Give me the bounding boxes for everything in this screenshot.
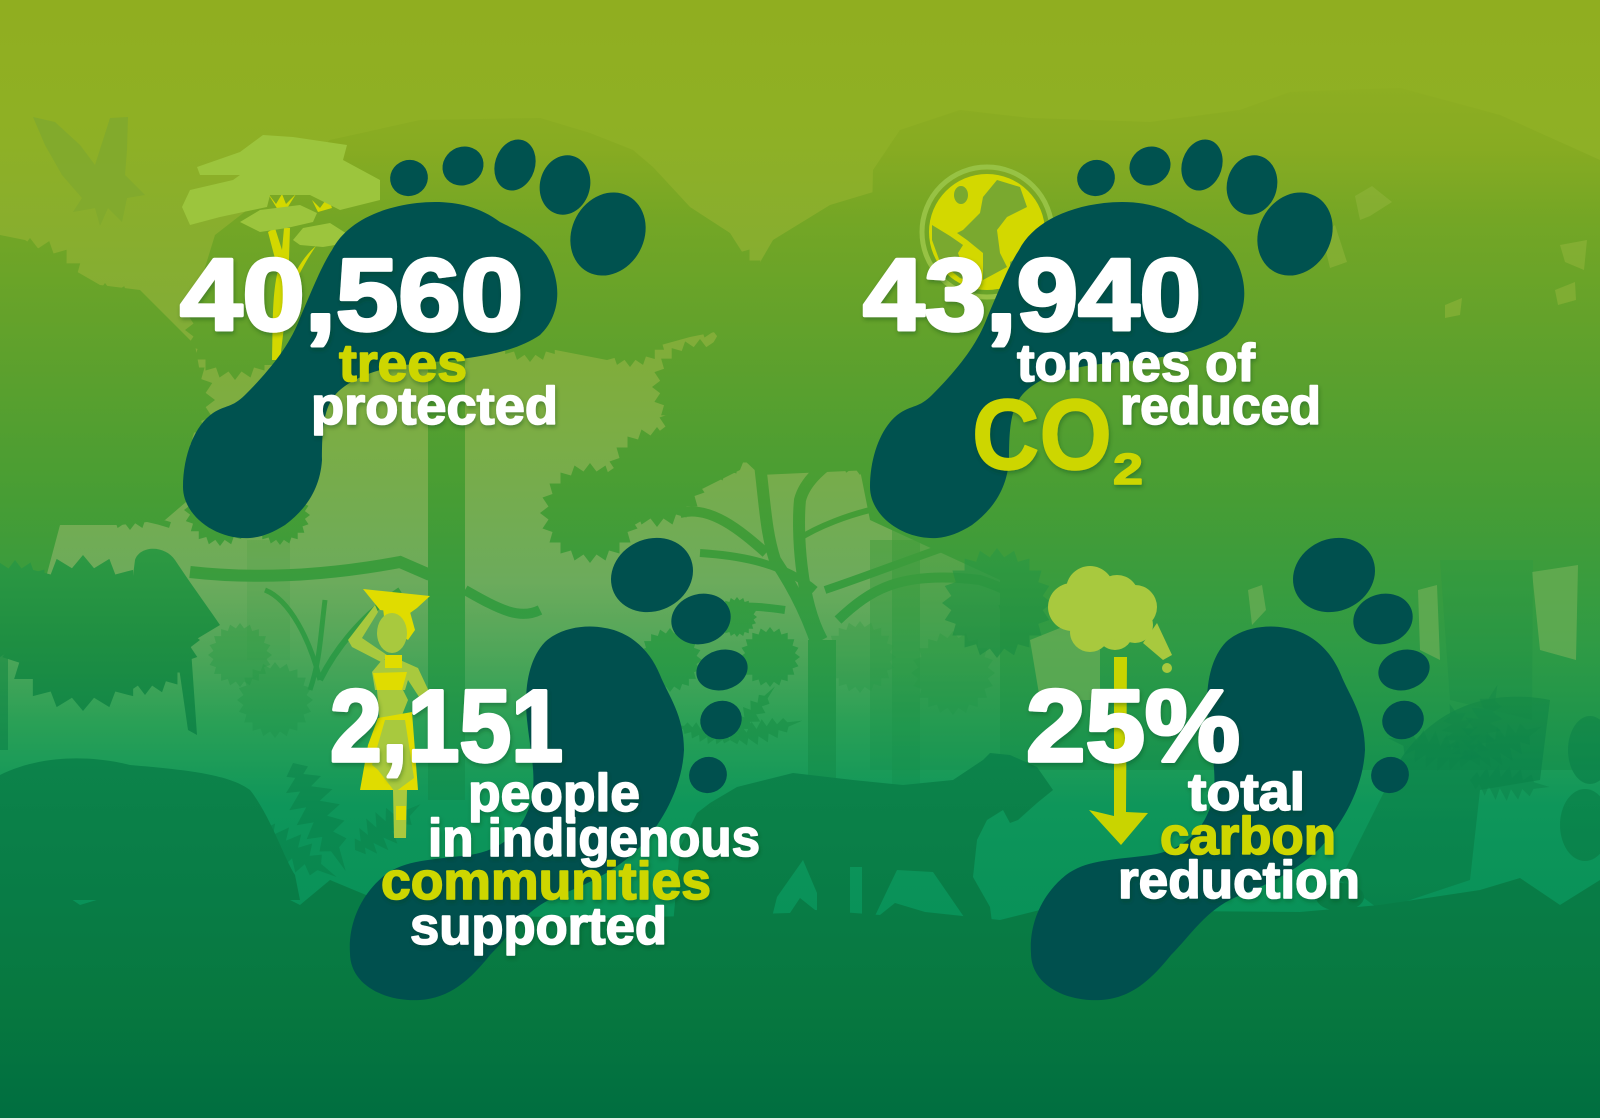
footprint <box>870 134 1347 538</box>
panel: total carbon reduction <box>1026 525 1434 1000</box>
statistic: 2,151 people in indigenous communities supported: communities <box>381 852 711 911</box>
statistic: 2,151 people in indigenous communities supported: 2,151 <box>330 669 563 783</box>
statistic: 40,560 trees protected <box>180 238 558 436</box>
icon: woman carrying a bowl <box>348 589 433 838</box>
statistic: 43,940 tonnes of CO2 reduced: 2 <box>1113 445 1143 494</box>
panel: trees protected <box>180 134 660 538</box>
statistic: 43,940 tonnes of CO2 reduced <box>863 238 1321 494</box>
statistic: 43,940 tonnes of CO2 reduced: tonnes of <box>1017 334 1255 393</box>
statistic: 25% total carbon reduction: 25% <box>1026 669 1240 783</box>
statistic: 43,940 tonnes of CO2 reduced: CO <box>972 379 1112 491</box>
statistic: 43,940 tonnes of CO2 reduced: reduced <box>1120 377 1321 436</box>
statistic: 2,151 people in indigenous communities supported <box>330 669 760 956</box>
footprint <box>350 525 752 1000</box>
footprint <box>183 134 660 538</box>
statistic: 25% total carbon reduction: carbon <box>1160 807 1336 866</box>
icon: eagle silhouette <box>33 117 145 226</box>
statistic: 25% total carbon reduction: reduction <box>1118 851 1360 910</box>
statistic: 2,151 people in indigenous communities supported: people <box>468 764 640 823</box>
forest light leaf patches <box>1030 186 1587 700</box>
statistic: 40,560 trees protected: 40,560 <box>180 238 523 352</box>
forest silhouette: mid canopy layer <box>0 158 1600 794</box>
statistic: 2,151 people in indigenous communities supported: in indigenous <box>428 809 760 868</box>
footprint <box>1031 525 1434 1000</box>
panel: people in indigenous communities supported <box>330 525 760 1000</box>
statistic: 40,560 trees protected: trees <box>339 334 467 393</box>
statistic: 25% total carbon reduction: total <box>1188 763 1305 822</box>
forest silhouette: dark foreground with animals and ferns <box>0 548 1600 1118</box>
arrow: downward <box>1089 657 1148 845</box>
icon: acacia tree <box>182 135 380 360</box>
statistic: 40,560 trees protected: protected <box>311 377 558 436</box>
panel: tonnes of CO2 reduced <box>863 134 1347 538</box>
statistic: 25% total carbon reduction <box>1026 669 1360 910</box>
statistic: 2,151 people in indigenous communities supported: supported <box>410 897 667 956</box>
bottom edge line <box>0 1118 1600 1120</box>
statistic: 43,940 tonnes of CO2 reduced: 43,940 <box>863 238 1201 352</box>
icon: globe <box>922 167 1052 297</box>
icon: carbon cloud <box>1048 566 1172 673</box>
